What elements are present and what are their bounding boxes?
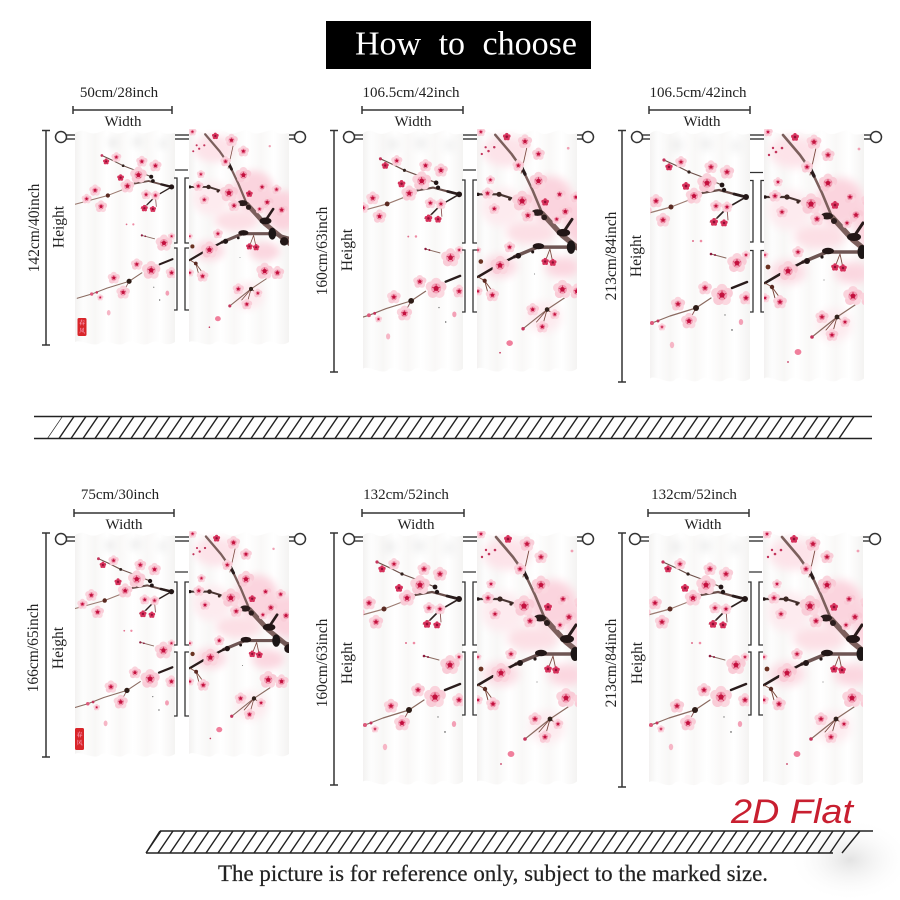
left curtain	[363, 534, 463, 784]
width dimension	[649, 85, 750, 130]
right curtain	[477, 531, 577, 784]
seal stamp: 风	[79, 326, 85, 335]
height dimension: Height	[629, 641, 646, 684]
right curtain	[763, 531, 863, 785]
left curtain	[649, 534, 749, 785]
width dimension: Width	[105, 114, 142, 130]
width dimension	[362, 487, 464, 533]
width dimension	[73, 85, 172, 130]
height dimension	[314, 130, 356, 372]
right curtain	[189, 129, 289, 344]
height dimension: Height	[628, 234, 645, 277]
height dimension: 213cm/84inch	[603, 618, 620, 707]
footer note: The picture is for reference only, subject to the marked size.	[218, 861, 768, 886]
height dimension: 160cm/63inch	[314, 618, 331, 707]
width dimension: 50cm/28inch	[80, 85, 159, 101]
width dimension: Width	[684, 114, 721, 130]
seal stamp: 春	[79, 318, 85, 327]
hem brackets	[462, 170, 477, 312]
panel: size 132cm by 160cm	[314, 487, 607, 785]
width dimension: Width	[395, 114, 432, 130]
left curtain	[650, 132, 750, 381]
curtain rod	[632, 132, 882, 142]
left curtain	[363, 132, 463, 372]
height dimension: 160cm/63inch	[314, 206, 331, 295]
curtain rod	[56, 132, 306, 142]
width dimension: Width	[106, 517, 143, 533]
panel: size 50cm by 142cm	[26, 85, 306, 345]
height dimension: 213cm/84inch	[603, 211, 620, 300]
width dimension: 106.5cm/42inch	[649, 85, 747, 101]
panel: size 132cm by 213cm	[603, 487, 893, 787]
hem brackets	[748, 572, 763, 715]
title: How to choose	[355, 26, 577, 62]
hem brackets	[174, 170, 189, 310]
height dimension: Height	[50, 205, 68, 248]
height dimension: Height	[50, 626, 67, 669]
seal stamp	[75, 728, 84, 750]
background shadow	[788, 818, 900, 900]
width dimension	[648, 487, 749, 533]
height dimension: 142cm/40inch	[26, 183, 43, 272]
hem brackets	[174, 572, 189, 716]
width dimension: 75cm/30inch	[81, 487, 160, 503]
seal stamp	[78, 318, 86, 336]
curtain rod	[630, 534, 880, 544]
curtain rod	[344, 534, 594, 544]
divider hatch band top	[34, 416, 872, 438]
width dimension: 132cm/52inch	[651, 487, 737, 503]
height dimension	[314, 533, 356, 785]
hem brackets	[750, 172, 764, 312]
right curtain	[764, 129, 864, 381]
seal stamp: 风	[76, 738, 83, 747]
seal stamp: 春	[76, 730, 83, 739]
width dimension: 106.5cm/42inch	[362, 85, 460, 101]
width dimension	[74, 487, 174, 533]
width dimension	[362, 85, 463, 130]
left curtain	[75, 534, 175, 756]
width dimension: Width	[398, 517, 435, 533]
panel: size 75cm by 166cm	[25, 487, 306, 757]
title	[326, 21, 591, 69]
curtain rod	[56, 534, 306, 544]
panel: size 106.5cm by 213cm	[603, 85, 894, 382]
right curtain	[477, 129, 577, 372]
label: 2D Flat: 2D Flat	[730, 793, 855, 831]
height dimension: Height	[339, 228, 356, 271]
width dimension: 132cm/52inch	[363, 487, 449, 503]
curtain rod	[344, 132, 594, 142]
height dimension	[603, 533, 646, 787]
height dimension: 166cm/65inch	[25, 603, 42, 692]
height dimension: Height	[339, 641, 356, 684]
divider hatch band bottom	[146, 831, 873, 853]
left curtain	[75, 132, 175, 344]
right curtain	[189, 531, 289, 756]
height dimension	[603, 130, 645, 382]
panel: size 106.5cm by 160cm	[314, 85, 602, 372]
height dimension	[25, 533, 67, 757]
height dimension	[26, 130, 68, 345]
width dimension: Width	[685, 517, 722, 533]
hem brackets	[462, 572, 477, 715]
